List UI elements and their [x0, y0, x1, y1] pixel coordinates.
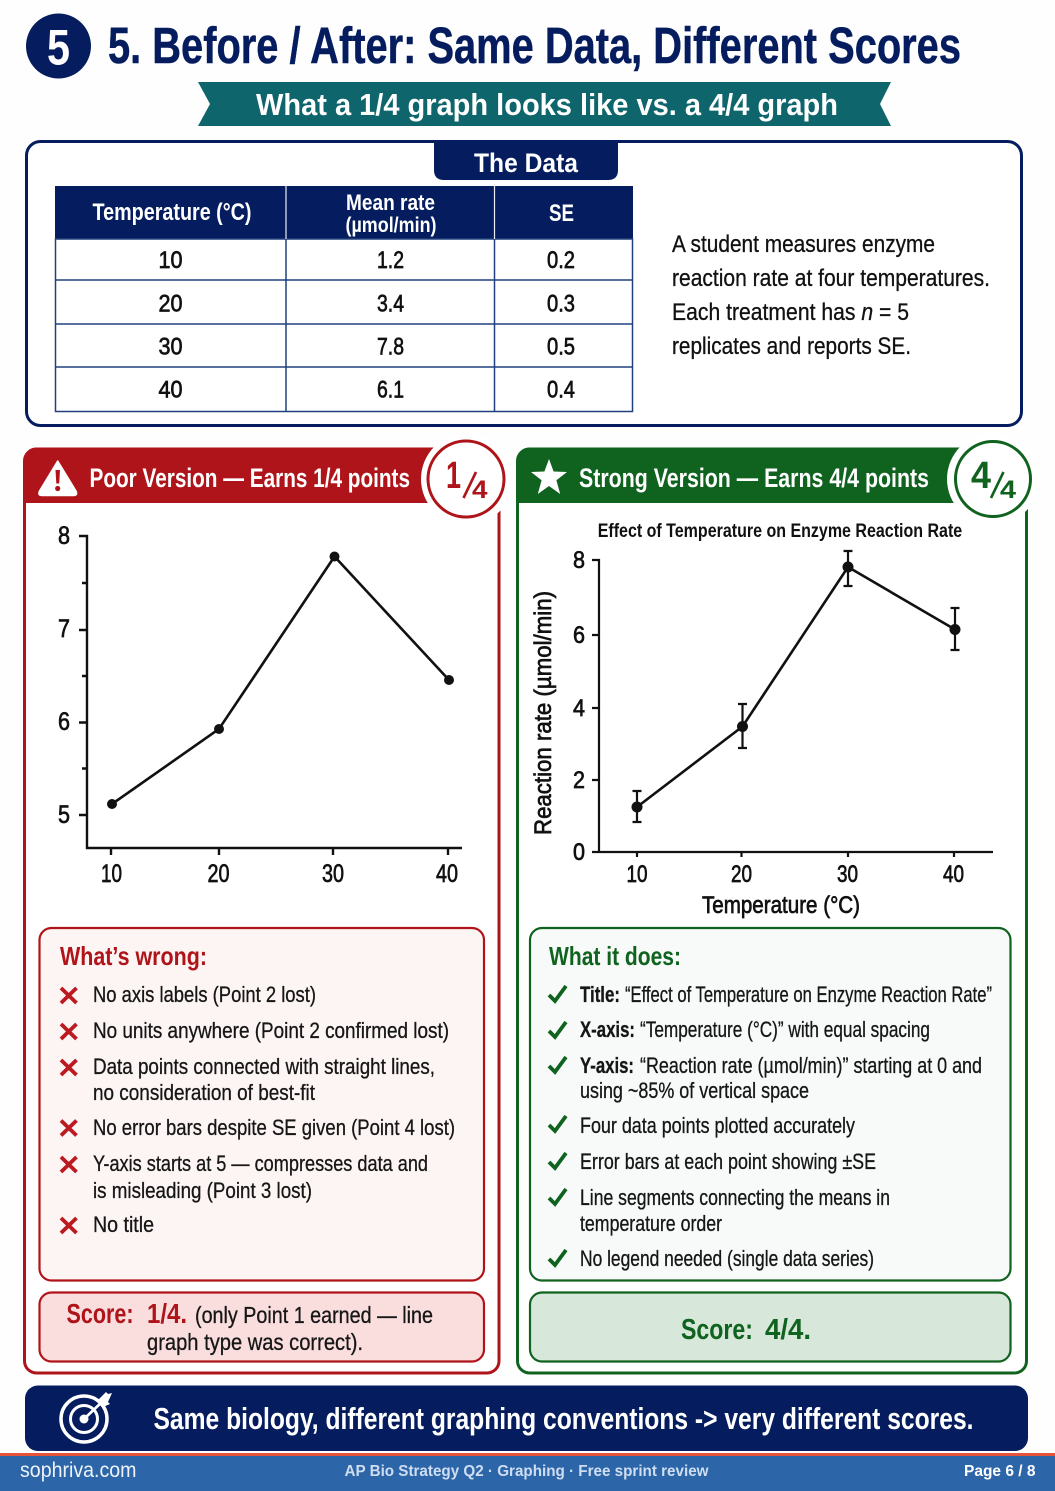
data table: 0.2	[547, 247, 575, 274]
y-axis label: Reaction rate (µmol/min)	[530, 591, 557, 835]
data table: 0.3	[547, 290, 575, 318]
chart: poor line graph: 20	[208, 860, 230, 888]
score box: poor: (only Point 1 earned — line	[195, 1302, 433, 1328]
does items list: Line segments connecting the means in	[580, 1185, 890, 1210]
wrong items list: No error bars despite SE given (Point 4 lost)	[93, 1115, 455, 1140]
chart: poor line graph: 10	[101, 860, 122, 888]
does items list: “Temperature (°C)” with equal spacing	[640, 1017, 930, 1042]
does items list	[580, 982, 992, 1271]
does items list: using ~85% of vertical space	[580, 1078, 809, 1103]
chart: strong line graph: 8	[573, 547, 585, 574]
chart: poor line graph: 40	[436, 860, 458, 888]
icon: star	[531, 459, 567, 494]
strong version heading: Strong Version — Earns 4/4 points	[579, 463, 929, 493]
wrong items list: No axis labels (Point 2 lost)	[93, 982, 316, 1007]
what it does heading: What it does:	[549, 941, 681, 971]
score box: strong: Score:	[681, 1314, 753, 1346]
does items list: Error bars at each point showing ±SE	[580, 1149, 876, 1174]
chart: strong line graph: 40	[943, 861, 964, 888]
x-axis label: Temperature (°C)	[702, 892, 860, 919]
data table: 0.4	[547, 376, 575, 404]
data table: 1.2	[377, 247, 404, 274]
score badge 4/4	[947, 433, 1039, 525]
does items list: No legend needed (single data series)	[580, 1246, 874, 1271]
score box: strong	[530, 1292, 1010, 1362]
subtitle ribbon: What a 1/4 graph looks like vs. a 4/4 graph	[256, 87, 838, 122]
wrong items list: is misleading (Point 3 lost)	[93, 1178, 312, 1203]
chart: poor line graph: 8	[58, 522, 70, 550]
what's wrong box	[40, 928, 484, 1280]
does items list: temperature order	[580, 1211, 722, 1236]
chart title: Effect of Temperature on Enzyme Reaction Rate	[598, 520, 962, 542]
takeaway banner	[25, 1386, 1028, 1451]
data table: Temperature (°C)	[92, 199, 252, 226]
footer course text: AP Bio Strategy Q2 · Graphing · Free sprint review	[344, 1463, 709, 1480]
score box: poor: Score:	[66, 1298, 134, 1329]
what's wrong heading: What’s wrong:	[60, 941, 207, 971]
does items list: “Reaction rate (µmol/min)” starting at 0 and	[640, 1053, 982, 1078]
score badge 4/4: 4	[1000, 476, 1016, 504]
score badge 4/4: 4	[971, 455, 991, 497]
section number badge: 5	[47, 20, 70, 76]
panel: poor version	[24, 433, 513, 1373]
section number badge	[26, 14, 91, 78]
chart: strong line graph: 4	[573, 695, 585, 722]
score badge 1/4: 1	[446, 455, 461, 497]
score badge 1/4: 4	[472, 476, 488, 504]
data description text: Each treatment has n = 5	[672, 299, 909, 326]
chart: strong line graph: 0	[573, 839, 585, 866]
score box: poor	[40, 1292, 484, 1362]
wrong items list	[93, 982, 455, 1237]
data table: 3.4	[377, 290, 404, 318]
chart: strong line graph: 2	[573, 767, 585, 794]
panel: the data	[26, 141, 1022, 426]
footer page number: Page 6 / 8	[964, 1463, 1036, 1480]
score box: poor: graph type was correct).	[147, 1329, 363, 1355]
footer bar	[0, 1453, 1055, 1491]
wrong items list: Data points connected with straight lines,	[93, 1054, 435, 1079]
score box: strong: 4/4.	[765, 1314, 811, 1346]
heading: the data tab: The Data	[474, 148, 579, 178]
strong version header	[517, 448, 965, 503]
data description text: reaction rate at four temperatures.	[672, 265, 990, 292]
score badge 1/4	[421, 433, 513, 525]
data table: 20	[158, 290, 182, 318]
data table: 6.1	[377, 376, 404, 404]
wrong items list: no consideration of best-fit	[93, 1080, 316, 1105]
chart: poor line graph: 7	[58, 615, 70, 643]
poor version header	[24, 448, 440, 503]
data table: 10	[158, 247, 182, 274]
does items list: Title:	[580, 982, 620, 1007]
data table: 0.5	[547, 334, 575, 360]
data description text: replicates and reports SE.	[672, 333, 911, 360]
chart: strong line graph: 10	[626, 861, 648, 888]
score box: poor: 1/4.	[147, 1298, 187, 1329]
data description text: A student measures enzyme	[672, 231, 935, 258]
data table: 40	[158, 376, 182, 404]
panel: strong version	[517, 433, 1039, 1373]
chart: strong line graph: 30	[837, 861, 858, 888]
icon: green checks	[549, 986, 566, 1265]
does items list: Y-axis:	[580, 1053, 634, 1078]
poor version heading: Poor Version — Earns 1/4 points	[90, 463, 410, 493]
data table: 30	[158, 334, 182, 360]
wrong items list: Y-axis starts at 5 — compresses data and	[93, 1151, 428, 1176]
icon: red crosses	[61, 988, 76, 1233]
wrong items list: No title	[93, 1212, 154, 1237]
data description text	[672, 231, 990, 360]
data table: 7.8	[377, 334, 404, 360]
chart: strong line graph: 20	[731, 861, 752, 888]
data table	[55, 186, 633, 412]
does items list: Four data points plotted accurately	[580, 1113, 855, 1138]
wrong items list: No units anywhere (Point 2 confirmed lost)	[93, 1018, 449, 1043]
data table: SE	[549, 200, 574, 227]
chart: poor line graph: 30	[322, 860, 344, 888]
what it does box	[530, 928, 1010, 1280]
chart: strong line graph: 6	[573, 622, 585, 649]
data table: (µmol/min)	[346, 214, 436, 237]
chart: poor line graph	[58, 522, 462, 888]
data table: Mean rate	[346, 190, 435, 215]
icon: warning triangle	[39, 461, 77, 496]
footer site name: sophriva.com	[20, 1459, 136, 1482]
chart: strong line graph	[530, 520, 993, 919]
chart: poor line graph: 5	[58, 801, 70, 829]
chart: poor line graph: 6	[58, 708, 70, 736]
does items list: X-axis:	[580, 1017, 635, 1042]
heading: the data tab	[434, 141, 618, 180]
icon: target with arrow	[61, 1392, 112, 1442]
